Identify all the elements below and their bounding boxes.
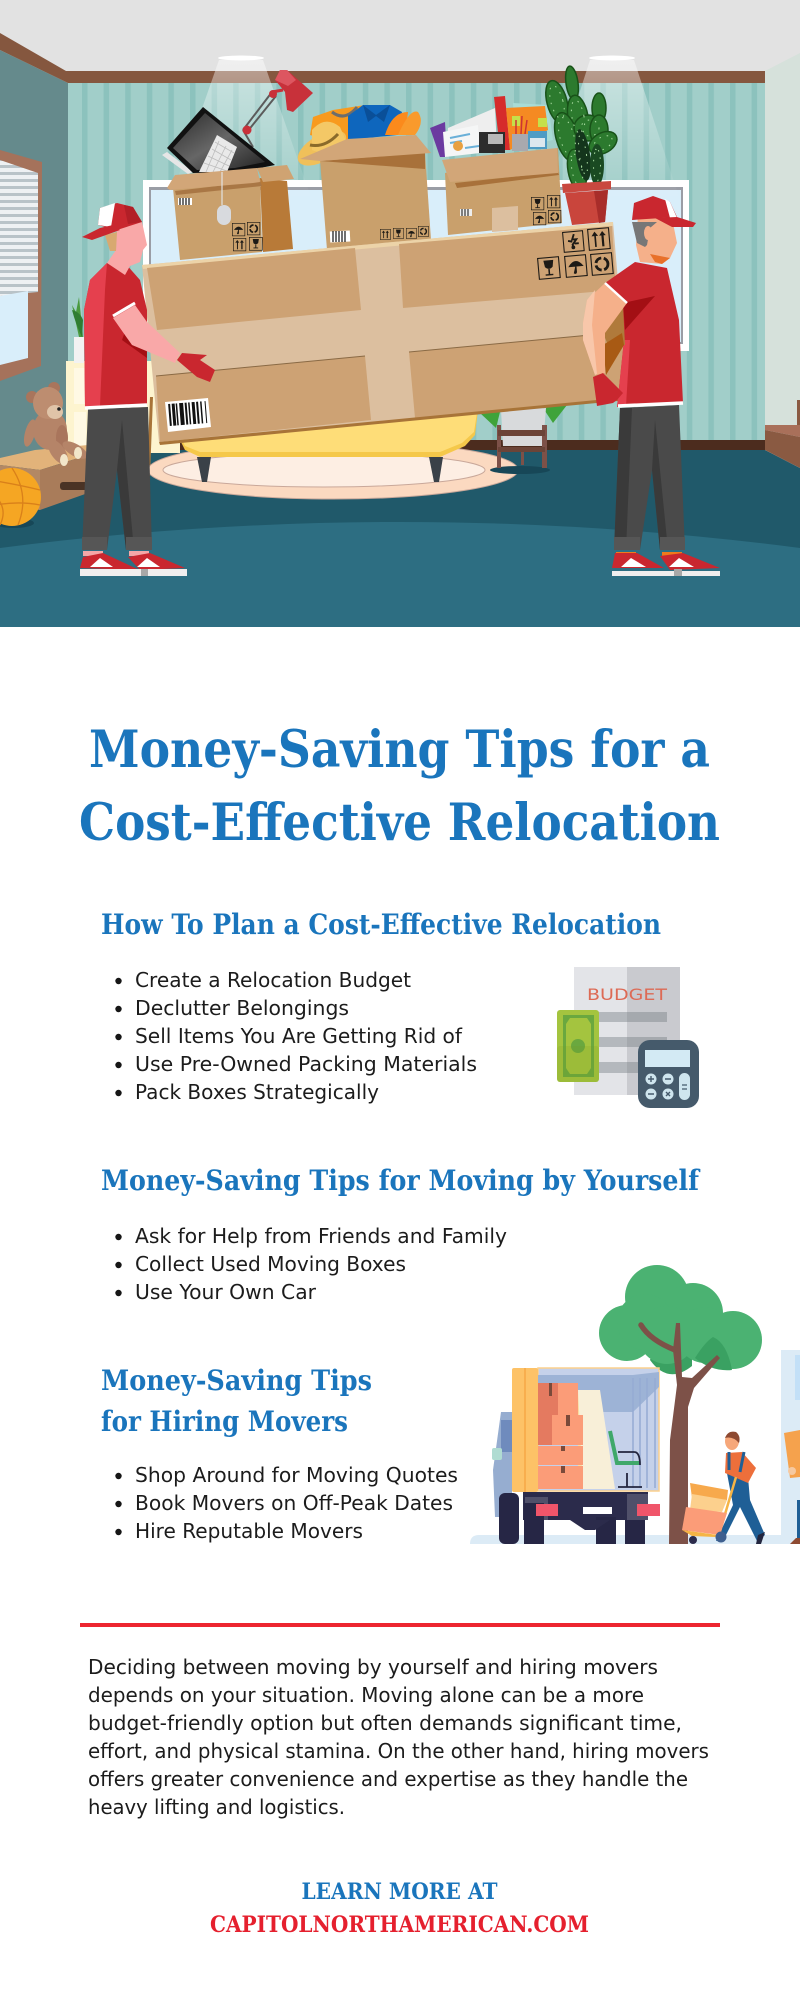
head	[107, 222, 147, 275]
ground	[470, 1535, 800, 1544]
bullet list: moving by yourself: Collect Used Moving Boxes	[135, 1252, 406, 1276]
call to action: LEARN MORE AT	[302, 1879, 498, 1905]
cardboard box: middle	[300, 135, 431, 250]
title	[79, 720, 720, 853]
bullet list: hiring movers: Book Movers on Off-Peak Dates	[135, 1491, 453, 1515]
bullet list: plan: Pack Boxes Strategically	[135, 1080, 379, 1104]
bullet list: plan	[115, 968, 477, 1104]
right mover	[583, 196, 720, 576]
ceiling	[0, 0, 800, 84]
crown moulding	[0, 33, 765, 83]
summary paragraph: budget-friendly option but often demands significant time,	[88, 1711, 682, 1735]
bullet list: plan: Sell Items You Are Getting Rid of	[135, 1024, 463, 1048]
office items	[430, 96, 553, 157]
icon: budget paper, money and calculator	[557, 967, 699, 1108]
right wall	[765, 53, 800, 441]
left plant	[72, 297, 84, 363]
right furniture	[765, 400, 800, 468]
summary paragraph: depends on your situation. Moving alone can be a more	[88, 1683, 644, 1707]
handling icons	[538, 228, 613, 279]
back wall with stripes	[66, 83, 765, 441]
box corner under arm	[603, 305, 625, 345]
call to action	[210, 1879, 589, 1938]
glove	[177, 353, 215, 382]
suitcase	[0, 445, 88, 510]
arm	[113, 305, 180, 363]
section heading: moving by yourself: Money-Saving Tips for Moving by Yourself	[101, 1164, 701, 1197]
cardboard box: left	[167, 165, 294, 260]
shoes	[612, 552, 720, 576]
tree	[599, 1265, 762, 1544]
section heading: hiring movers: for Hiring Movers	[101, 1405, 348, 1438]
lamp	[242, 70, 313, 147]
rug	[148, 441, 518, 499]
mover with hand truck	[682, 1432, 765, 1544]
glove	[593, 373, 623, 406]
bullet list: plan: Create a Relocation Budget	[135, 968, 411, 992]
truck	[492, 1368, 660, 1544]
monitor and keyboard	[162, 107, 275, 174]
bullet list: hiring movers: Shop Around for Moving Quotes	[135, 1463, 458, 1487]
shirt	[84, 263, 147, 407]
hero illustration: two movers carrying a box	[0, 0, 800, 627]
section heading: plan: How To Plan a Cost-Effective Relocation	[101, 908, 661, 941]
bullet list: plan: Use Pre-Owned Packing Materials	[135, 1052, 477, 1076]
cabinet	[66, 361, 180, 476]
shoes	[80, 551, 187, 576]
bullet list: moving by yourself	[115, 1224, 507, 1304]
building	[781, 1350, 800, 1536]
foreground floor	[0, 522, 800, 627]
floor	[0, 450, 800, 627]
baseboard	[68, 440, 765, 450]
icon: budget paper, money and calculator: BUDGET	[587, 985, 667, 1004]
pants	[614, 405, 685, 550]
shirt	[605, 262, 683, 407]
bullet list: hiring movers	[115, 1463, 458, 1543]
sofa	[180, 406, 478, 482]
ceiling lights	[170, 56, 680, 200]
pants	[82, 407, 152, 550]
section heading: hiring movers: Money-Saving Tips	[101, 1364, 372, 1397]
summary paragraph	[88, 1655, 709, 1819]
hat and clothes	[292, 105, 421, 173]
illustration: moving truck, tree and mover	[470, 1265, 800, 1544]
title: Money-Saving Tips for a	[89, 720, 710, 780]
call to action: CAPITOLNORTHAMERICAN.COM	[210, 1912, 589, 1938]
divider	[80, 1623, 720, 1627]
left wall	[0, 50, 68, 465]
second mover partial	[784, 1430, 800, 1544]
bullet list: plan: Declutter Belongings	[135, 996, 349, 1020]
summary paragraph: Deciding between moving by yourself and hiring movers	[88, 1655, 658, 1679]
plant stand	[480, 405, 567, 474]
head	[636, 215, 677, 264]
teddy bear	[22, 382, 90, 467]
summary paragraph: heavy lifting and logistics.	[88, 1795, 345, 1819]
cardboard box: right	[442, 148, 562, 235]
bullet list: moving by yourself: Ask for Help from Friends and Family	[135, 1224, 507, 1248]
title: Cost-Effective Relocation	[79, 793, 720, 853]
basketball	[0, 468, 41, 528]
summary paragraph: offers greater convenience and expertise as they handle the	[88, 1767, 688, 1791]
cactus in pot	[542, 65, 621, 225]
bullet list: hiring movers: Hire Reputable Movers	[135, 1519, 363, 1543]
barcode label	[165, 398, 211, 432]
arm	[583, 283, 627, 375]
summary paragraph: effort, and physical stamina. On the other hand, hiring movers	[88, 1739, 709, 1763]
left window	[0, 150, 42, 381]
large back window	[143, 180, 689, 351]
large moving box	[142, 222, 628, 445]
section heading: hiring movers	[101, 1364, 372, 1438]
bullet list: moving by yourself: Use Your Own Car	[135, 1280, 317, 1304]
left mover	[80, 203, 215, 576]
